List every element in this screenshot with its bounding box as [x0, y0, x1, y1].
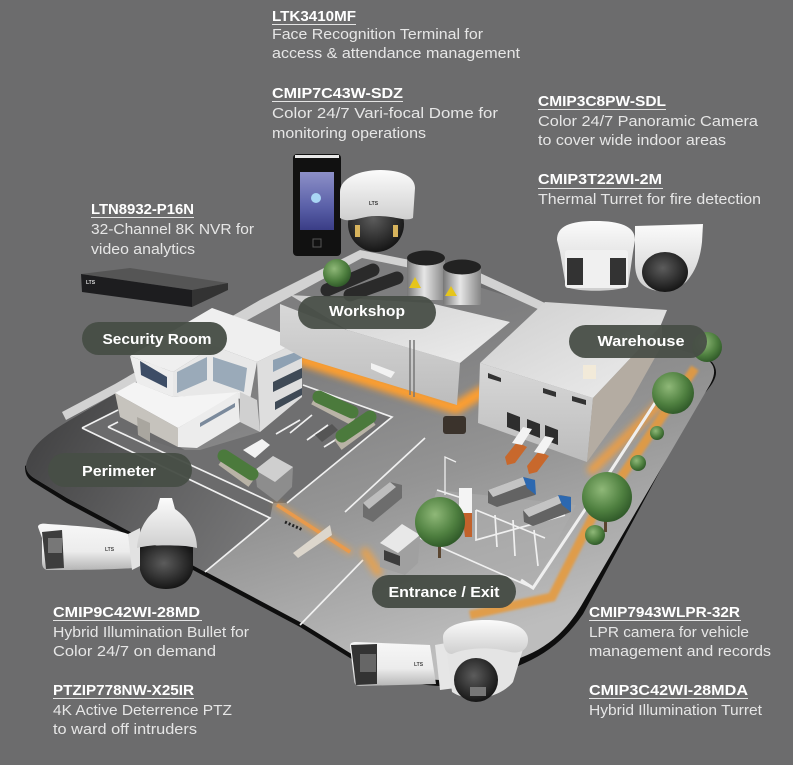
lower block left wall: [115, 393, 178, 447]
text: CMIP3C42WI-28MDA: CMIP3C42WI-28MDA: [589, 682, 748, 699]
text: CMIP3C8PW-SDL: to cover wide indoor areas: [538, 133, 726, 149]
pill: Entrance / Exit: [372, 575, 516, 608]
product: bullet camera (perimeter): [38, 524, 134, 570]
text: CMIP3C42WI-28MDA: [589, 682, 762, 719]
product: NVR recorder: LTS: [86, 280, 96, 286]
blue trucks: [488, 477, 571, 526]
roof: [480, 302, 667, 398]
trees and hedges: [222, 332, 722, 558]
pill: Workshop: [298, 296, 436, 329]
text: PTZIP778NW-X25IR: [53, 682, 232, 738]
orange trucks: [505, 442, 549, 474]
text: CMIP3T22WI-2M: Thermal Turret for fire detection: [538, 192, 761, 208]
product: LPR bullet camera: LTS: [414, 662, 424, 668]
product: vari-focal dome camera: LTS: [369, 201, 379, 207]
right side strip: [470, 368, 695, 615]
text: LTK3410MF: [272, 8, 520, 62]
text: CMIP9C42WI-28MD: Color 24/7 on demand: [53, 644, 216, 660]
barrier arm: [277, 505, 350, 552]
roof: [130, 308, 302, 372]
text: CMIP3T22WI-2M: [538, 171, 761, 208]
text: LTN8932-P16N: video analytics: [91, 242, 195, 258]
pill: Entrance / Exit: Entrance / Exit: [388, 584, 500, 601]
perimeter lawn: [26, 392, 270, 572]
product: hybrid illumination turret camera: [435, 620, 528, 702]
pill: Security Room: [82, 322, 227, 355]
text: PTZIP778NW-X25IR: to ward off intruders: [53, 722, 197, 738]
security room building: [115, 308, 302, 448]
lamp post: [445, 457, 456, 495]
product: LPR bullet camera: [350, 642, 436, 686]
product: panoramic turret camera: [557, 221, 635, 291]
text: PTZIP778NW-X25IR: PTZIP778NW-X25IR: [53, 682, 194, 699]
forklift: [443, 416, 466, 434]
ground plate edge: [25, 250, 716, 686]
roof: [290, 295, 510, 363]
pill: Warehouse: [569, 325, 707, 358]
site scene: [25, 250, 722, 686]
text: CMIP9C42WI-28MD: CMIP9C42WI-28MD: [53, 604, 200, 621]
text: CMIP3C8PW-SDL: Color 24/7 Panoramic Camera: [538, 114, 759, 130]
product: PTZ camera: [128, 498, 197, 589]
trucks and cars: [243, 416, 571, 537]
text: LTK3410MF: access & attendance management: [272, 46, 520, 62]
text: CMIP3C8PW-SDL: [538, 93, 759, 149]
guard houses and barrier: [255, 456, 420, 575]
back fence: [62, 250, 545, 420]
gray truck: [363, 482, 402, 522]
text: LTN8932-P16N: LTN8932-P16N: [91, 201, 194, 218]
text: CMIP7C43W-SDZ: Color 24/7 Vari-focal Dome for: [272, 106, 498, 122]
right curb: [521, 403, 655, 588]
product: bullet camera (perimeter): LTS: [105, 547, 115, 553]
text: CMIP7943WLPR-32R: CMIP7943WLPR-32R: [589, 604, 740, 621]
pill: Perimeter: [48, 453, 192, 487]
text: CMIP9C42WI-28MD: Hybrid Illumination Bullet for: [53, 625, 249, 641]
product: face recognition terminal: [293, 154, 341, 256]
road markings: [82, 385, 565, 625]
text: LTN8932-P16N: [91, 201, 254, 258]
orange light glow: [277, 360, 662, 572]
security parking lot: [110, 385, 392, 503]
right wall: [257, 340, 302, 432]
text: CMIP7943WLPR-32R: LPR camera for vehicle: [589, 625, 749, 641]
text: LTK3410MF: Face Recognition Terminal for: [272, 27, 483, 43]
lower block front wall: [178, 392, 240, 448]
text: CMIP7C43W-SDZ: CMIP7C43W-SDZ: [272, 85, 403, 102]
vents: [488, 373, 586, 405]
text: LTK3410MF: LTK3410MF: [272, 8, 356, 25]
product: vari-focal dome camera: [340, 170, 415, 252]
front wall: [478, 363, 593, 462]
text: CMIP7943WLPR-32R: [589, 604, 771, 660]
right wall: [587, 325, 662, 462]
tanks: [407, 258, 445, 300]
lower block roof: [115, 382, 240, 428]
text: LTN8932-P16N: 32-Channel 8K NVR for: [91, 222, 254, 238]
dock doors: [507, 412, 558, 445]
text: CMIP7C43W-SDZ: monitoring operations: [272, 126, 426, 142]
side wall base: [240, 392, 260, 432]
warehouse building: [478, 302, 667, 462]
roof tree: [323, 259, 351, 287]
wall: [280, 304, 460, 405]
product: thermal turret camera: [635, 224, 703, 292]
workshop building: [280, 250, 510, 405]
text: CMIP3C42WI-28MDA: Hybrid Illumination Turret: [589, 703, 762, 719]
product: NVR recorder: [81, 268, 228, 307]
pill: Workshop: Workshop: [329, 303, 405, 320]
perimeter strip: [82, 410, 273, 518]
text: CMIP7943WLPR-32R: management and records: [589, 644, 771, 660]
white truck: [459, 488, 472, 513]
upper front: [130, 356, 173, 397]
text: CMIP7C43W-SDZ: [272, 85, 498, 142]
ground plate: [26, 250, 714, 680]
text: PTZIP778NW-X25IR: 4K Active Deterrence PTZ: [53, 703, 232, 719]
text: CMIP9C42WI-28MD: [53, 604, 249, 660]
window bands: [273, 350, 302, 372]
text: CMIP3T22WI-2M: CMIP3T22WI-2M: [538, 171, 662, 188]
cars: [243, 439, 270, 458]
black pipes: [327, 270, 397, 295]
pill: Warehouse: Warehouse: [598, 333, 684, 350]
text: CMIP3C8PW-SDL: CMIP3C8PW-SDL: [538, 93, 666, 110]
truck lot: [420, 490, 576, 588]
pill: Perimeter: Perimeter: [82, 463, 156, 480]
pill: Security Room: Security Room: [102, 331, 212, 348]
